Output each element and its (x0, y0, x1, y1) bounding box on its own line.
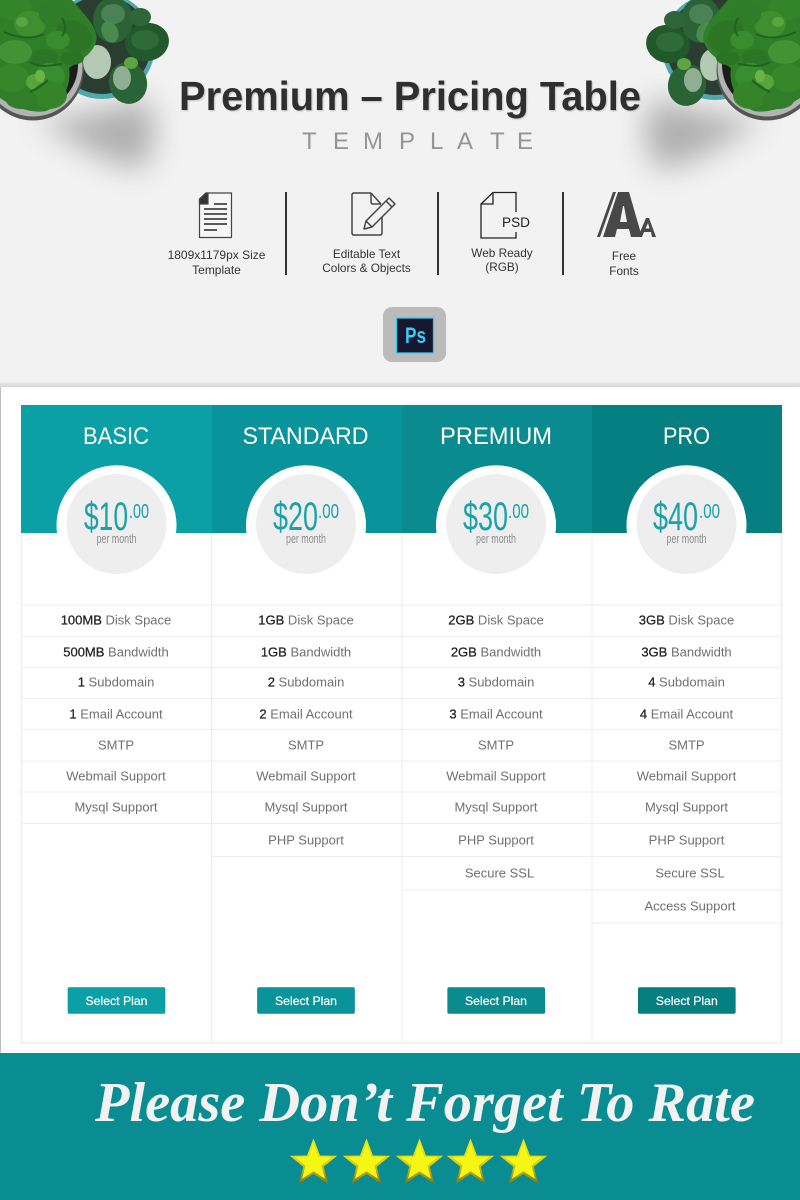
feature rows: Webmail Support (446, 768, 546, 784)
divider (562, 192, 564, 275)
icon: document with pencil (352, 193, 395, 235)
price badge (56, 465, 176, 574)
footer banner (0, 1053, 800, 1200)
five stars (290, 1138, 547, 1184)
feature: template size (168, 193, 266, 277)
title: Premium – Pricing Table (179, 73, 641, 119)
feature rows: Secure SSL (655, 866, 725, 880)
column: basic (21, 405, 212, 1014)
feature: editable text: Editable Text (333, 247, 401, 261)
select button (258, 988, 354, 1014)
feature rows: PHP Support (649, 832, 725, 848)
feature rows (21, 605, 211, 824)
select button: Select Plan (656, 994, 718, 1008)
price badge (436, 465, 556, 574)
select button: Select Plan (465, 994, 527, 1008)
plan name: BASIC (83, 423, 149, 450)
subtitle: TEMPLATE (302, 128, 533, 155)
panel: pricing table card (0, 384, 800, 1053)
select button (68, 988, 165, 1014)
photoshop badge: Ps (405, 323, 426, 348)
panel: table outline and column dividers (22, 406, 782, 1043)
feature rows: 2 Subdomain (268, 674, 344, 690)
feature rows: Secure SSL (465, 866, 534, 880)
price badge: .00 (508, 501, 529, 523)
feature rows: Webmail Support (256, 768, 356, 784)
feature: template size: 1809x1179px Size (168, 248, 266, 262)
feature rows: SMTP (478, 738, 514, 752)
plan name: PRO (663, 423, 710, 450)
feature rows: 2 Email Account (259, 706, 353, 722)
plan name: STANDARD (242, 423, 368, 450)
feature rows: 100MB Disk Space (61, 612, 171, 628)
feature: free fonts (597, 192, 656, 278)
price badge (626, 465, 746, 574)
feature rows: 1GB Bandwidth (261, 644, 351, 660)
feature rows: 3 Subdomain (458, 674, 534, 690)
right plant decoration (643, 0, 800, 170)
feature rows: 2GB Bandwidth (451, 644, 541, 660)
price badge: per month (286, 531, 326, 546)
price badge: .00 (699, 501, 720, 523)
feature: web ready: Web Ready (471, 246, 533, 260)
select button (638, 988, 735, 1014)
feature: template size: Template (192, 263, 241, 277)
feature rows (212, 605, 402, 856)
feature rows: 3 Email Account (449, 706, 543, 722)
price badge: per month (476, 531, 516, 546)
feature rows: Webmail Support (637, 768, 737, 784)
photoshop badge (383, 307, 446, 362)
feature: free fonts: Fonts (609, 264, 639, 278)
plan header (212, 405, 402, 533)
select button: Select Plan (275, 994, 337, 1008)
feature rows: Access Support (644, 898, 736, 914)
feature: web ready: PSD (502, 215, 530, 230)
price badge: .00 (318, 501, 339, 523)
select button (448, 988, 545, 1014)
plan header (592, 405, 782, 533)
feature rows: 4 Email Account (640, 706, 733, 722)
column: pro (592, 405, 782, 1014)
icon: letters A (597, 192, 656, 237)
price badge (246, 465, 366, 574)
feature rows: Mysql Support (264, 800, 348, 814)
rating message: Please Don’t Forget To Rate (94, 1072, 755, 1134)
feature rows (592, 605, 782, 923)
feature: free fonts: Free (612, 249, 637, 263)
divider (285, 192, 287, 275)
feature rows: PHP Support (458, 832, 534, 848)
price badge: .00 (129, 501, 149, 523)
column: premium (402, 405, 592, 1014)
price badge: per month (96, 531, 136, 546)
feature rows: Mysql Support (74, 800, 158, 814)
divider (437, 192, 439, 275)
column: standard (212, 405, 402, 1014)
feature rows: 3GB Bandwidth (641, 644, 732, 660)
title: Premium – Pricing Table (180, 74, 642, 120)
feature rows: 500MB Bandwidth (63, 644, 169, 660)
feature: web ready: (RGB) (485, 260, 519, 274)
price badge: $30 (463, 495, 508, 539)
price badge: $20 (273, 495, 318, 539)
feature rows: 1GB Disk Space (258, 612, 354, 628)
feature rows: 1 Email Account (69, 706, 163, 722)
plan name: PREMIUM (440, 423, 552, 450)
price badge: $10 (84, 495, 128, 539)
feature rows (402, 605, 592, 890)
feature rows: 1 Subdomain (78, 674, 154, 690)
feature: web ready (471, 192, 533, 274)
feature: editable text (322, 193, 411, 275)
feature rows: PHP Support (268, 832, 344, 848)
feature rows: 2GB Disk Space (448, 612, 544, 628)
feature rows: Webmail Support (66, 768, 166, 784)
feature rows: Mysql Support (454, 800, 538, 814)
price badge: $40 (653, 495, 698, 539)
feature rows: SMTP (668, 738, 705, 752)
feature rows: 3GB Disk Space (639, 612, 734, 628)
feature rows: 4 Subdomain (648, 674, 725, 690)
icon: PSD file (481, 192, 516, 238)
feature rows: Mysql Support (645, 800, 728, 814)
plan header (21, 405, 212, 533)
left plant decoration (0, 0, 172, 170)
icon: document (200, 193, 232, 238)
price badge: per month (666, 531, 706, 546)
feature: editable text: Colors & Objects (322, 261, 411, 275)
plan header (402, 405, 592, 533)
feature rows: SMTP (98, 738, 134, 752)
select button: Select Plan (86, 994, 148, 1008)
feature rows: SMTP (288, 738, 324, 752)
